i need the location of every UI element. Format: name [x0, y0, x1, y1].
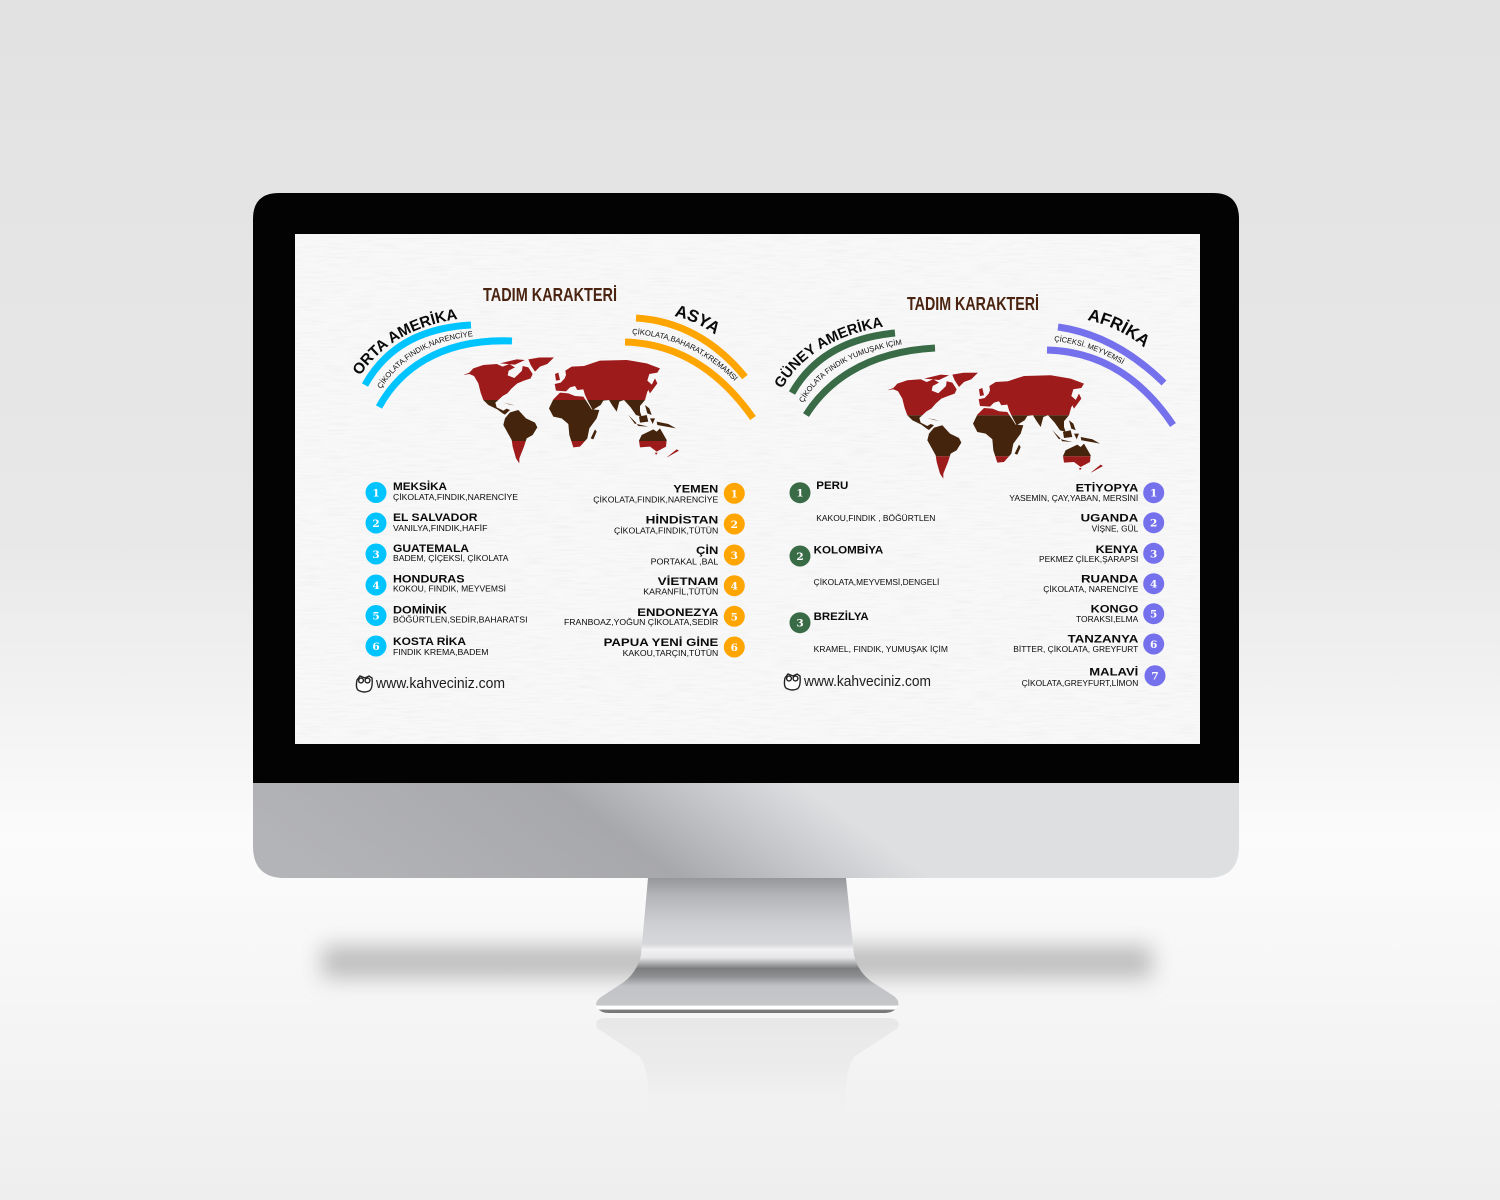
item: Honduras — [366, 574, 506, 596]
item: Yemen: YEMEN — [673, 484, 718, 496]
item: Çin: 3 — [731, 550, 738, 562]
title: right panel: TADIM KARAKTERİ — [907, 294, 1039, 314]
item: Çin: ÇİN — [696, 544, 718, 557]
item: Kolombiya — [790, 543, 939, 587]
monitor chin — [253, 783, 1239, 878]
item: Vietnam: VİETNAM — [658, 575, 718, 588]
item: Vietnam: KARANFİL,TÜTÜN — [643, 587, 719, 596]
item: Honduras: 4 — [372, 580, 380, 592]
monitor stand — [596, 878, 898, 1013]
item: Hindistan: HİNDİSTAN — [646, 513, 718, 526]
item: Kosta Rika: 6 — [372, 641, 380, 653]
arc group: Orta Amerika: ÇİKOLATA,FINDIK,NARENCİYE — [378, 331, 473, 388]
item: Uganda: 2 — [1150, 518, 1157, 530]
item: Etiyopya: 1 — [1150, 488, 1157, 500]
item: Kenya: 3 — [1150, 548, 1157, 560]
item: Ruanda: RUANDA — [1081, 574, 1138, 586]
item: Meksika: ÇİKOLATA,FINDIK,NARENCİYE — [393, 493, 518, 502]
item: Meksika — [366, 480, 518, 503]
item: Malavi — [1022, 665, 1166, 688]
item: Uganda: UGANDA — [1081, 513, 1138, 525]
item: Ruanda: 4 — [1150, 579, 1157, 591]
item: Vietnam: 4 — [731, 581, 738, 593]
arc group: Afrika — [1046, 310, 1176, 427]
item: Kolombiya: KOLOMBİYA — [814, 543, 883, 556]
item: Tanzanya — [1013, 634, 1164, 654]
item: Papua Yeni Gine: KAKOU,TARÇIN,TÜTÜN — [623, 649, 719, 658]
item: Guatemala: GUATEMALA — [393, 543, 469, 555]
item: Peru: PERU — [816, 480, 848, 492]
item: Guatemala: BADEM, ÇİÇEKSİ, ÇİKOLATA — [393, 554, 509, 563]
arc group: Asya: ÇİKOLATA,BAHARAT,KREMAMSI — [632, 328, 738, 381]
item: Guatemala: 3 — [372, 549, 380, 561]
item: Tanzanya: BİTTER, ÇİKOLATA, GREYFURT — [1013, 645, 1138, 654]
item: El Salvador — [366, 512, 488, 534]
item: Etiyopya: ETİYOPYA — [1076, 482, 1138, 495]
item: Çin: PORTAKAL ,BAL — [651, 557, 719, 566]
monitor shadow — [322, 946, 1152, 978]
item: Tanzanya: TANZANYA — [1068, 634, 1138, 646]
item: Brezilya: KRAMEL, FINDIK, YUMUŞAK İÇİM — [814, 645, 948, 654]
item: Vietnam — [643, 575, 745, 596]
item: Dominik: BÖĞÜRTLEN,SEDİR,BAHARATSI — [393, 616, 528, 625]
arc group: Asya: ASYA — [674, 306, 718, 334]
item: Malavi: ÇİKOLATA,GREYFURT,LİMON — [1022, 679, 1139, 688]
item: Kongo — [1076, 603, 1164, 624]
screen: infographic panel — [295, 234, 1200, 744]
item: Meksika: 1 — [372, 488, 380, 500]
item: Peru: KAKOU,FINDIK , BÖĞÜRTLEN — [816, 514, 936, 523]
item: Kenya: KENYA — [1096, 544, 1138, 556]
title: left panel: TADIM KARAKTERİ — [483, 285, 617, 305]
arc group: Asya — [624, 306, 756, 420]
item: Meksika: MEKSİKA — [393, 480, 447, 493]
item: Papua Yeni Gine: PAPUA YENİ GİNE — [604, 636, 718, 649]
item: Honduras: KOKOU, FINDIK, MEYVEMSİ — [393, 585, 506, 594]
website url left: www.kahveciniz.com — [375, 676, 505, 692]
item: Kenya — [1039, 543, 1164, 564]
item: Brezilya: BREZİLYA — [814, 610, 869, 623]
item: Brezilya: 3 — [796, 618, 804, 630]
item: Malavi: MALAVİ — [1089, 666, 1138, 679]
item: Endonezya — [564, 606, 745, 627]
arc group: Güney Amerika: GÜNEY AMERİKA — [775, 318, 883, 387]
item: El Salvador: VANILYA,FINDIK,HAFİF — [393, 524, 488, 533]
item: Yemen: ÇİKOLATA,FINDIK,NARENCİYE — [593, 495, 718, 504]
arc group: Orta Amerika — [354, 309, 512, 409]
item: Ruanda — [1043, 573, 1164, 594]
item: Kongo: KONGO — [1091, 604, 1139, 616]
list: Afrika — [1009, 482, 1166, 688]
item: Hindistan — [614, 513, 745, 535]
item: Endonezya: ENDONEZYA — [637, 607, 718, 619]
item: Tanzanya: 6 — [1150, 639, 1157, 651]
item: Kongo: TORAKSI,ELMA — [1076, 615, 1139, 624]
website url right: www.kahveciniz.com — [803, 674, 931, 690]
icon: owl left — [356, 676, 372, 692]
arc group: Afrika: AFRİKA — [1088, 310, 1148, 348]
item: Hindistan: 2 — [731, 519, 738, 531]
list: Orta Amerika — [366, 480, 528, 657]
arc group: Güney Amerika — [775, 318, 936, 417]
arc group: Orta Amerika: ORTA AMERİKA — [354, 309, 458, 374]
item: Dominik: 5 — [372, 610, 380, 622]
item: El Salvador: 2 — [372, 518, 380, 530]
world map: left — [464, 357, 679, 464]
item: Peru — [790, 480, 936, 523]
item: Papua Yeni Gine — [604, 636, 745, 658]
item: Brezilya — [790, 610, 948, 654]
item: Kosta Rika — [366, 635, 489, 657]
item: Uganda: VİŞNE, GÜL — [1092, 525, 1139, 534]
item: Guatemala — [366, 543, 509, 564]
item: Yemen — [593, 483, 745, 504]
stand reflection — [596, 1018, 899, 1120]
item: Honduras: HONDURAS — [393, 574, 464, 586]
item: Kolombiya: 2 — [796, 551, 804, 563]
item: Kosta Rika: KOSTA RİKA — [393, 635, 466, 648]
item: Endonezya: 5 — [731, 611, 738, 623]
monitor bezel — [253, 193, 1239, 783]
item: Etiyopya: YASEMİN, ÇAY,YABAN, MERSİNİ — [1009, 494, 1138, 503]
item: Malavi: 7 — [1151, 671, 1159, 683]
item: Kolombiya: ÇİKOLATA,MEYVEMSİ,DENGELİ — [814, 578, 939, 587]
item: Kongo: 5 — [1150, 609, 1157, 621]
item: Dominik: DOMİNİK — [393, 604, 447, 616]
item: Çin — [651, 544, 745, 566]
item: Etiyopya — [1009, 482, 1164, 503]
item: Kenya: PEKMEZ ÇİLEK,ŞARAPSI — [1039, 555, 1138, 564]
item: El Salvador: EL SALVADOR — [393, 512, 478, 524]
list: Güney Amerika — [790, 480, 948, 654]
item: Peru: 1 — [796, 488, 804, 500]
item: Endonezya: FRANBOAZ,YOĞUN ÇİKOLATA,SEDİR — [564, 618, 719, 627]
item: Kosta Rika: FINDIK KREMA,BADEM — [393, 648, 489, 657]
item: Papua Yeni Gine: 6 — [731, 642, 738, 654]
item: Ruanda: ÇİKOLATA, NARENCİYE — [1043, 585, 1138, 594]
arc group: Afrika: ÇİCEKSİ. MEYVEMSİ — [1054, 335, 1125, 364]
world map: right — [888, 372, 1103, 478]
item: Hindistan: ÇİKOLATA,FINDIK,TÜTÜN — [614, 526, 719, 535]
arc group: Güney Amerika: ÇİKOLATA FINDIK YUMUŞAK İÇİM — [800, 339, 902, 402]
item: Yemen: 1 — [731, 488, 738, 500]
item: Dominik — [366, 604, 528, 626]
list: Asya — [564, 483, 745, 658]
item: Uganda — [1081, 512, 1164, 534]
icon: owl right — [784, 674, 800, 690]
